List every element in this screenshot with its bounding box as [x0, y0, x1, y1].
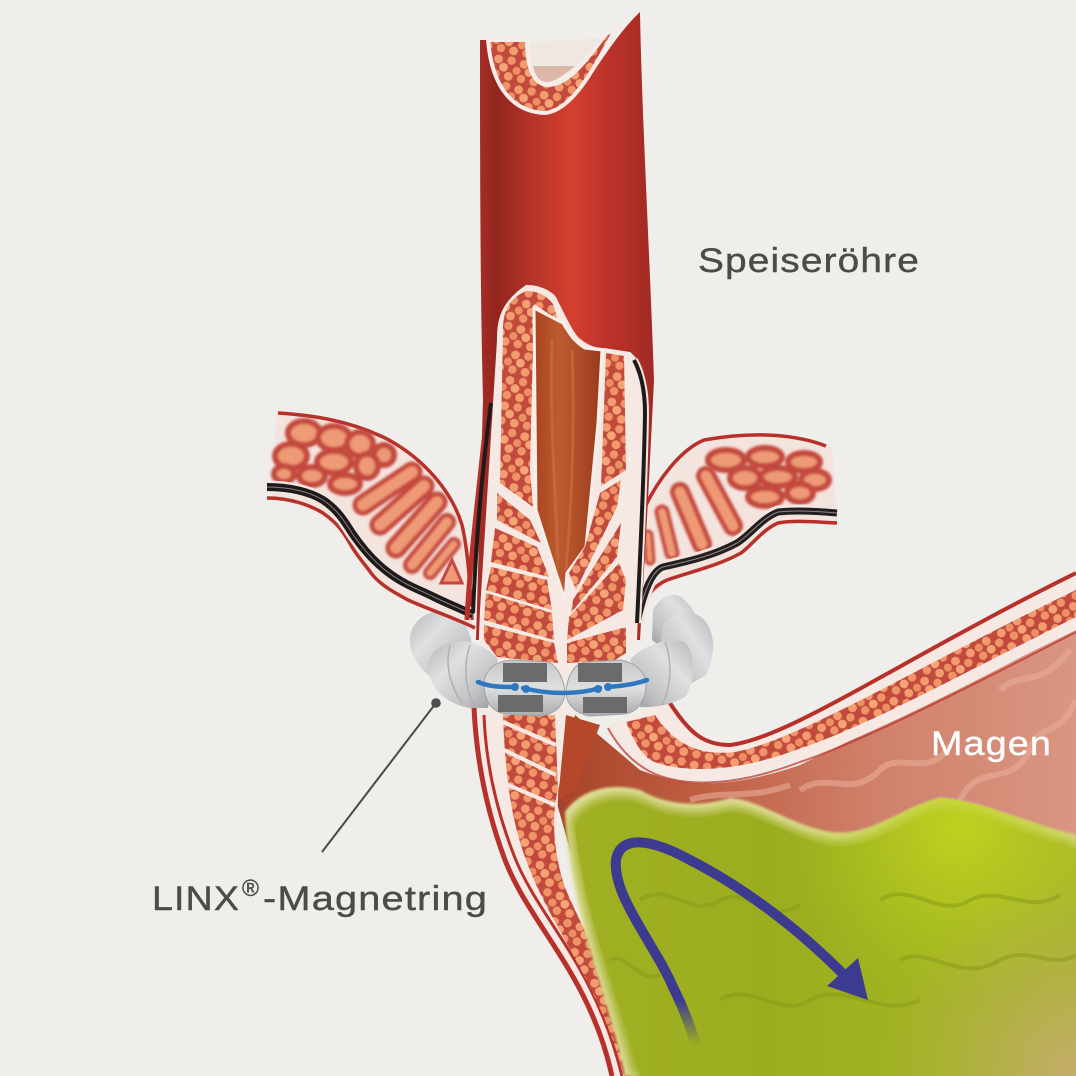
stomach contents: green acid pool — [565, 787, 1076, 1076]
arrow: reflux direction — [616, 842, 868, 1045]
label: Magen: Magen — [931, 725, 1052, 763]
label: LINX-Magnetring: ® — [242, 875, 259, 901]
label: LINX-Magnetring: LINX — [152, 880, 240, 918]
black layer along right side — [634, 360, 645, 623]
esophagus cross-section — [467, 285, 645, 730]
black band right — [637, 511, 837, 623]
label: LINX-Magnetring — [152, 875, 488, 918]
black band left — [267, 487, 473, 615]
oblique muscle segments left — [484, 493, 558, 663]
right middle bead — [660, 613, 713, 690]
red layer and black layer along left side — [467, 440, 484, 620]
front right bead — [630, 640, 693, 707]
muscle fibres left — [274, 421, 394, 493]
upper cut wall — [488, 28, 616, 113]
diaphragm: right — [637, 435, 837, 623]
inside of upper opening — [530, 38, 602, 82]
icon: LINX ring rear beads — [410, 595, 713, 690]
left outer bead — [410, 611, 472, 682]
upper left wall — [500, 291, 558, 507]
lumen — [534, 308, 602, 600]
right capsule — [566, 660, 646, 716]
blue wire — [478, 680, 647, 693]
pointer line: LINX ring — [322, 698, 441, 852]
left capsule — [484, 660, 565, 716]
label: LINX-Magnetring: -Magnetring — [263, 880, 488, 918]
label: Speiseröhre: Speiseröhre — [698, 242, 920, 280]
icon: LINX ring front beads and capsules — [428, 640, 693, 716]
upper right wall — [601, 353, 626, 486]
esophagus tube — [476, 12, 654, 640]
muscle fibres right — [708, 448, 829, 506]
right upper bead — [652, 595, 698, 650]
stomach lining — [556, 630, 1076, 850]
front left bead — [428, 641, 498, 708]
oblique muscle segments right — [567, 480, 626, 663]
diaphragm: left — [267, 413, 475, 628]
lower esophagus wall — [474, 705, 642, 1076]
stomach wall — [605, 573, 1076, 782]
